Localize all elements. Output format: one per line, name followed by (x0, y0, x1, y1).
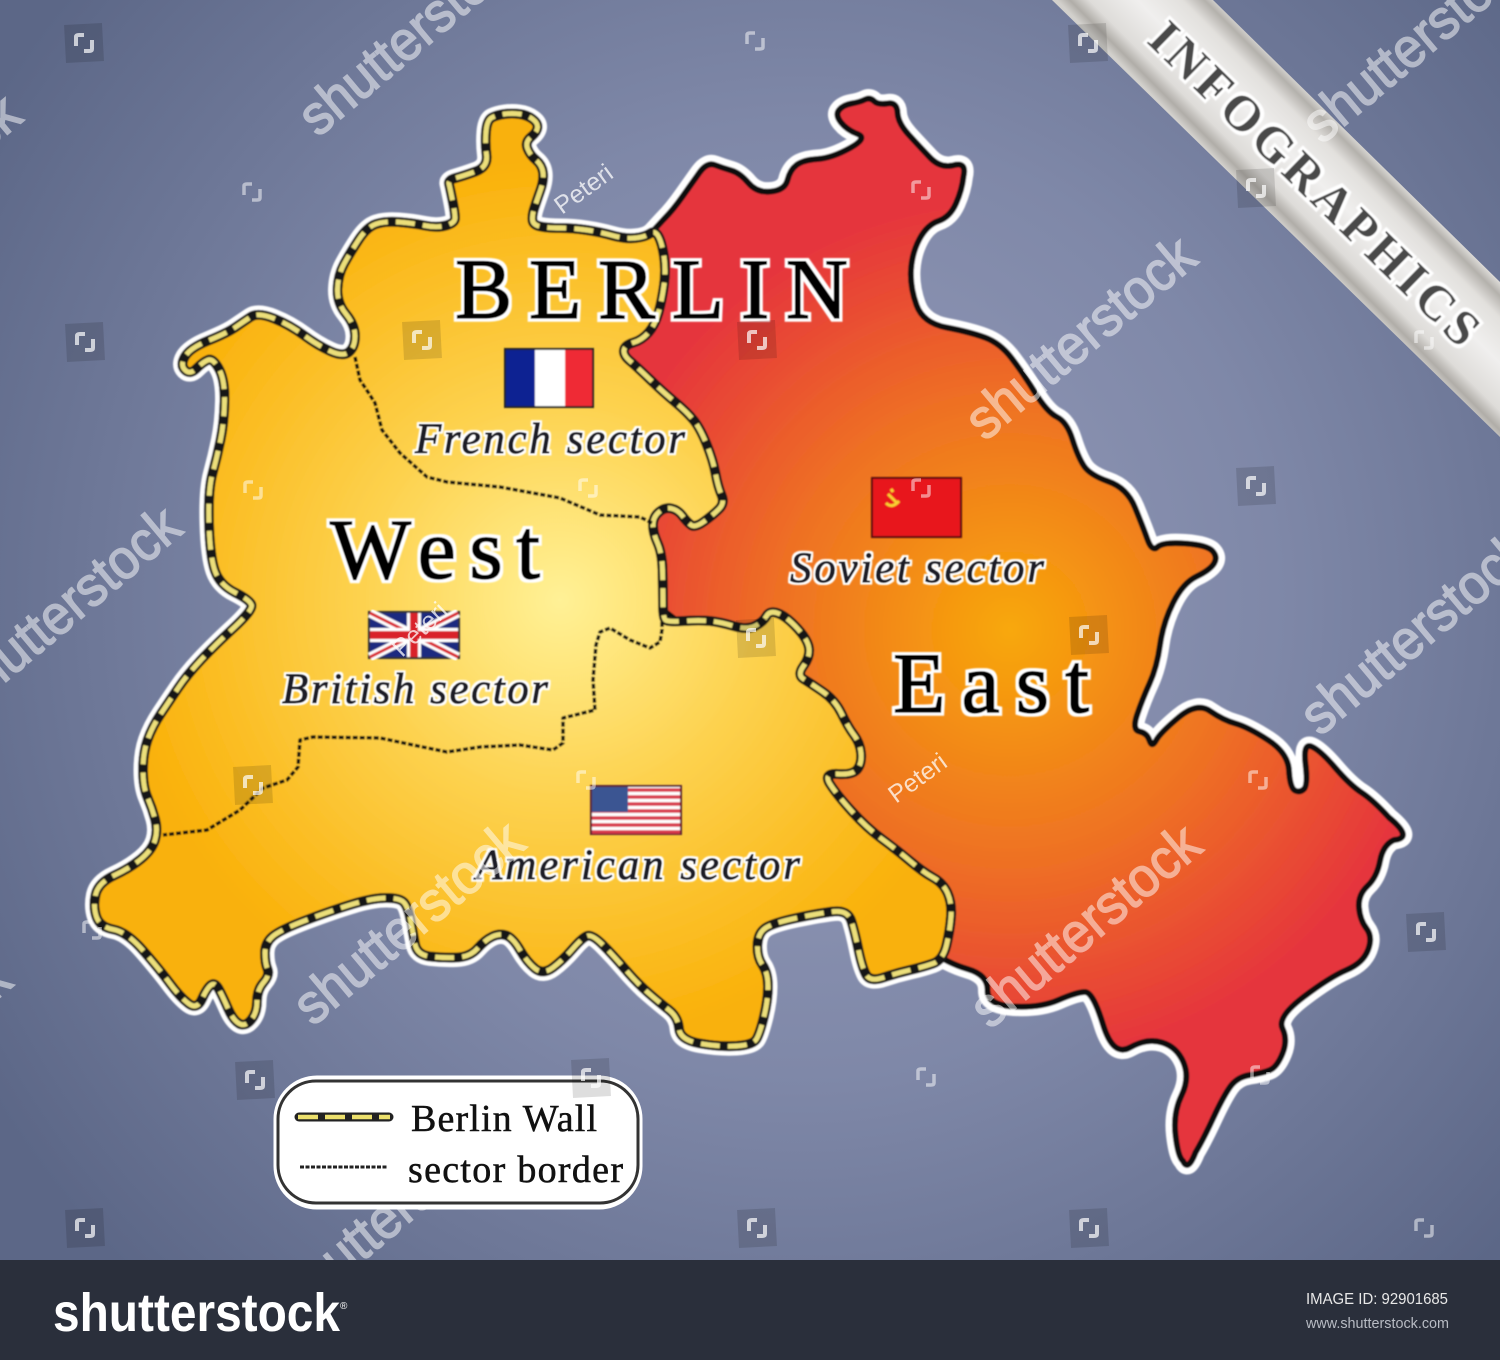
legend text: sector border: sector border (408, 1149, 623, 1191)
flag: United Kingdom (369, 612, 459, 658)
East Berlin: Soviet sector shape (600, 99, 1403, 1165)
label: American sector: American sector (473, 842, 800, 889)
West Berlin: allied sectors shape with Berlin Wall (94, 114, 951, 1046)
legend text: Berlin Wall: Berlin Wall (411, 1098, 597, 1140)
watermark: Peteri bottom: Peteri (883, 748, 952, 809)
footer url: www.shutterstock.com (1305, 1315, 1449, 1332)
heading: BERLIN: BERLIN (455, 241, 848, 337)
footer logo: shutterstock (53, 1283, 341, 1343)
label: British sector: British sector (282, 666, 548, 713)
map outline halo (94, 99, 1403, 1165)
watermark: Peteri top: Peteri (549, 159, 618, 220)
legend symbol: sector border (300, 1166, 387, 1168)
flag: France (504, 348, 594, 408)
watermark text: shutterstock (957, 810, 1213, 1039)
corner banner: INFOGRAPHICS (1052, 0, 1500, 437)
footer bar (0, 1260, 1500, 1360)
watermark: Peteri on British flag: Peteri (387, 597, 453, 662)
legend symbol: Berlin Wall (298, 1112, 390, 1122)
sector border: British and American (163, 622, 662, 835)
label: French sector: French sector (414, 416, 685, 463)
label: Soviet sector: Soviet sector (790, 545, 1044, 592)
footer image id: IMAGE ID: 92901685 (1306, 1291, 1448, 1308)
watermark text: shutterstock (280, 807, 536, 1036)
corner banner: INFOGRAPHICS: INFOGRAPHICS (1138, 9, 1492, 357)
flag: Soviet Union (871, 477, 962, 538)
watermark text: shutterstock (952, 222, 1208, 451)
legend (277, 1079, 639, 1206)
watermark text below legend: shutterstock (265, 1096, 521, 1325)
map of Berlin (94, 99, 1403, 1165)
footer registered mark: ® (340, 1301, 348, 1312)
heading: East: East (893, 635, 1089, 731)
sector border: French and British (355, 357, 652, 523)
heading: West: West (330, 501, 540, 597)
flag: United States (591, 786, 681, 834)
